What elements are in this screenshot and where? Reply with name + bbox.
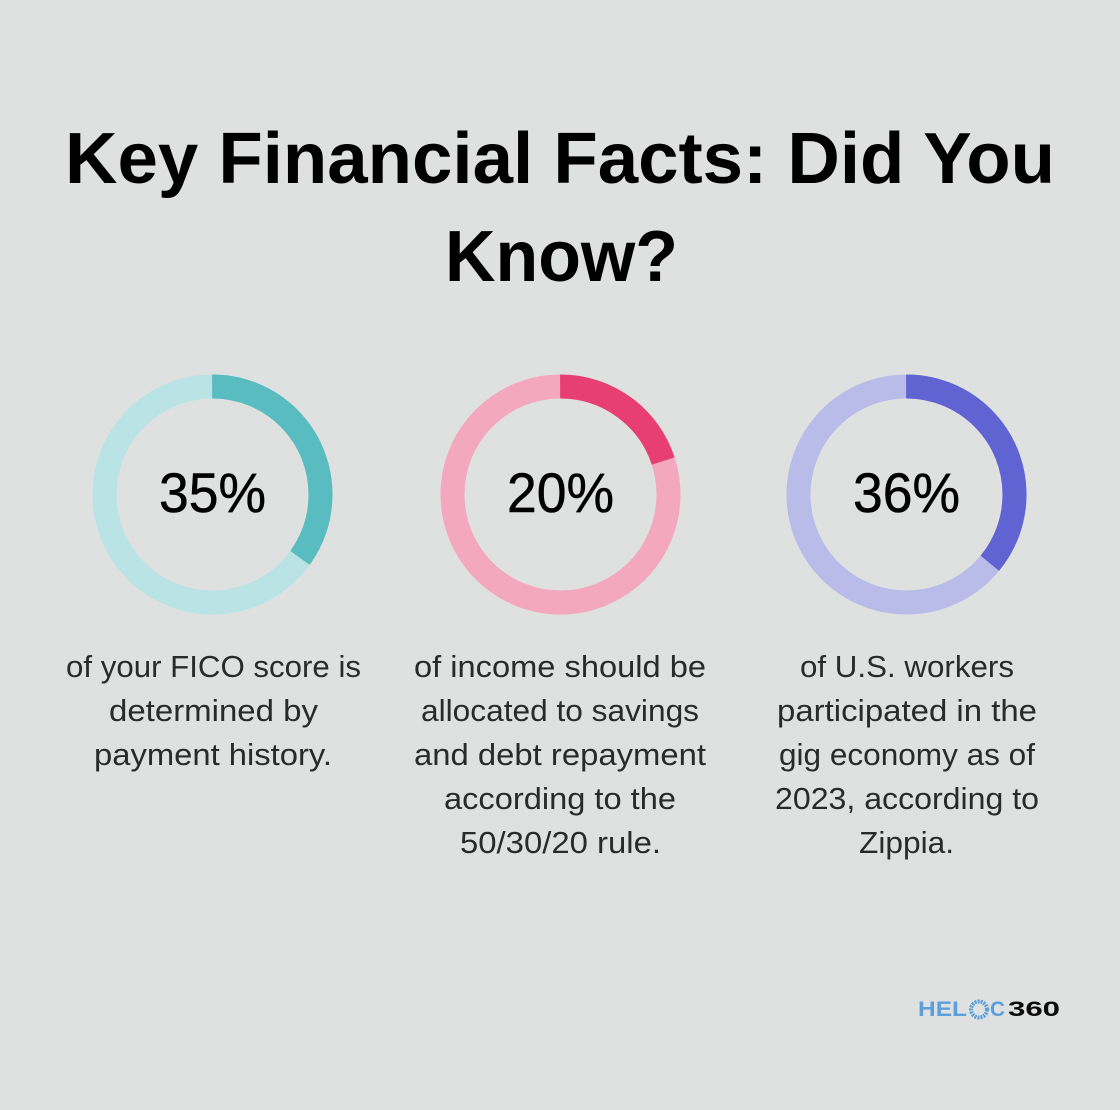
- stat value: 36%: 36%: [853, 461, 960, 524]
- description: 50/30/20 rule: according to the: [444, 781, 676, 816]
- description: 50/30/20 rule: 50/30/20 rule.: [460, 825, 661, 860]
- description: 50/30/20 rule: of income should be: [414, 649, 706, 684]
- donut chart: 36%: [798, 386, 1014, 602]
- description: gig economy: Zippia.: [859, 825, 954, 860]
- description: payment history: [66, 649, 361, 772]
- description: gig economy: of U.S. workers: [800, 649, 1014, 684]
- description: 50/30/20 rule: and debt repayment: [414, 737, 706, 772]
- icon: logo swirl ring: [971, 1002, 987, 1018]
- description: gig economy: [775, 649, 1039, 860]
- donut chart: 35%: [104, 386, 320, 602]
- description: payment history: of your FICO score is: [66, 649, 361, 684]
- stat value: 20%: 20%: [507, 461, 614, 524]
- description: 50/30/20 rule: [414, 649, 706, 860]
- donut chart: 20%: [452, 386, 668, 602]
- description: payment history: determined by: [109, 693, 319, 728]
- logo: HELOC360: HEL: [918, 998, 967, 1021]
- description: gig economy: participated in the: [777, 693, 1037, 728]
- title: Know?: [445, 217, 678, 297]
- logo: HELOC360: C: [990, 998, 1005, 1021]
- description: gig economy: 2023, according to: [775, 781, 1039, 816]
- logo: HELOC360: [918, 998, 1060, 1021]
- title: Key Financial Facts: Did You: [65, 119, 1055, 199]
- logo: HELOC360: 360: [1008, 998, 1060, 1021]
- stat value: 35%: 35%: [159, 461, 266, 524]
- description: payment history: payment history.: [94, 737, 332, 772]
- description: gig economy: gig economy as of: [779, 737, 1035, 772]
- panel: 36% gig economy stat: [775, 386, 1039, 860]
- description: 50/30/20 rule: allocated to savings: [421, 693, 699, 728]
- panel: 20% income stat: [414, 386, 706, 860]
- title: [65, 119, 1055, 297]
- panel: 35% FICO stat: [66, 386, 361, 772]
